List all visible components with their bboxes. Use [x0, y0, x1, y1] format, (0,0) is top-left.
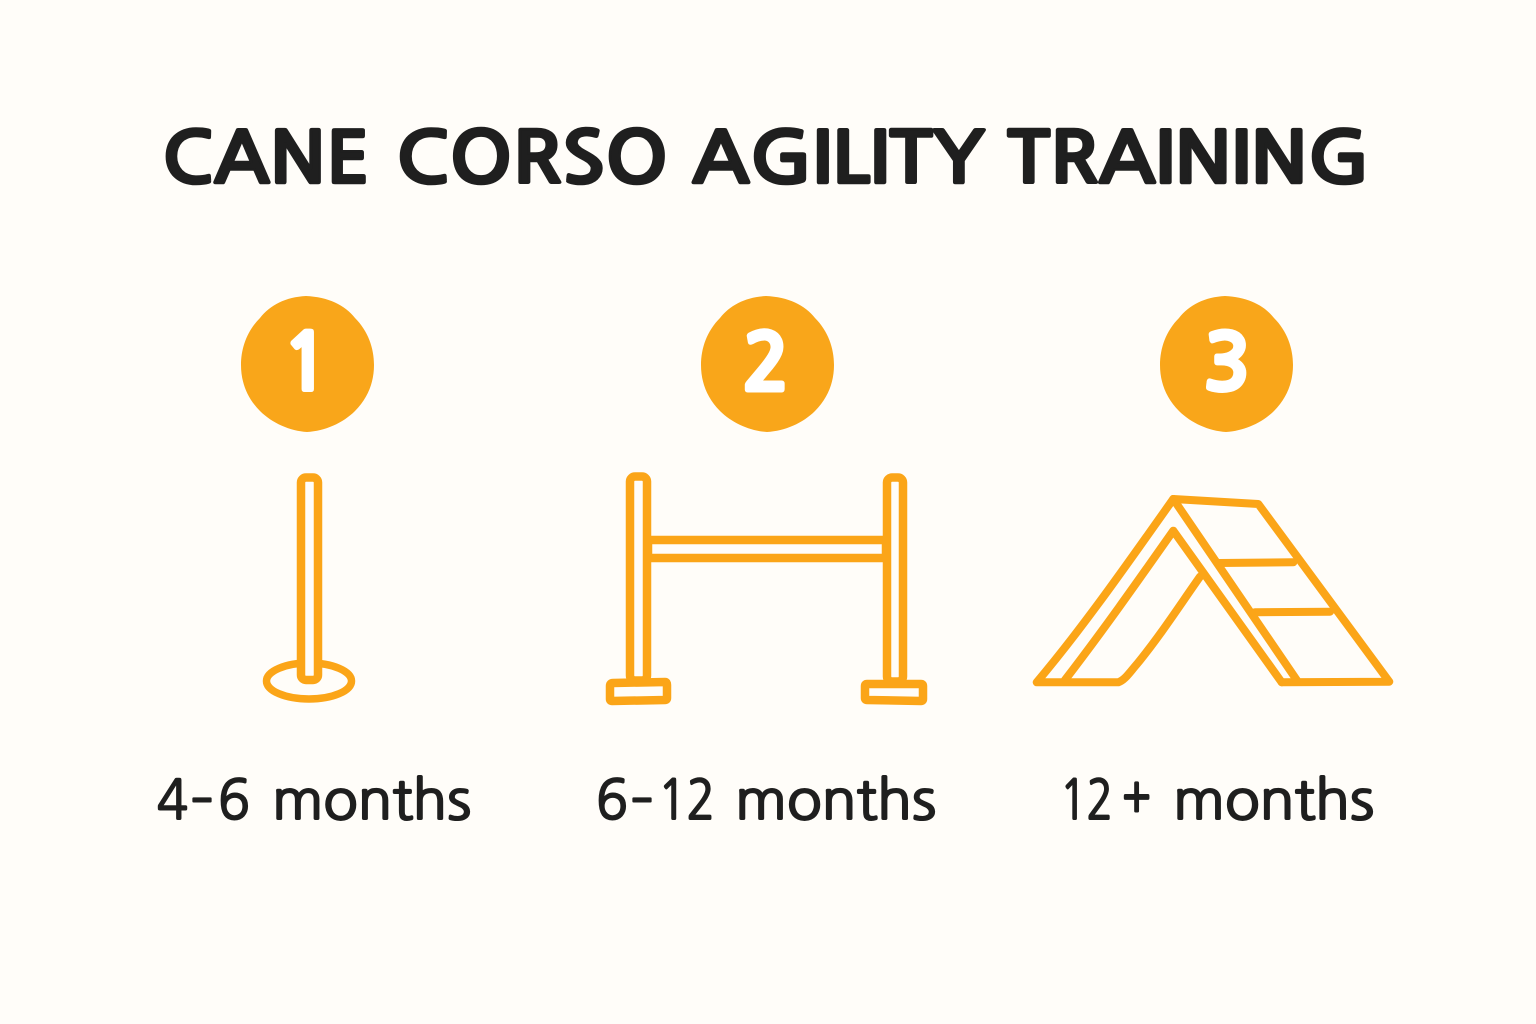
step 1 badge: [241, 296, 374, 432]
step 3 badge: [1160, 296, 1293, 432]
title: CORSO: [396, 123, 668, 194]
title: TRAINING: [1007, 123, 1370, 194]
step 2 badge: 2: [742, 324, 790, 402]
title: AGILITY: [692, 123, 986, 194]
label: 6-12 months: –: [630, 773, 654, 827]
label: 6-12 months: 12: [658, 773, 715, 827]
label: 4-6 months: –: [190, 773, 214, 827]
label: 12+ months: months: [1173, 773, 1374, 827]
label: 6-12 months: 6: [596, 773, 628, 827]
label: 4-6 months: 6: [218, 773, 250, 827]
label: 4-6 months: months: [272, 773, 471, 827]
label: 4-6 months: [157, 773, 471, 827]
label: 6-12 months: months: [735, 773, 936, 827]
title: CANE: [162, 123, 370, 194]
label: 12+ months: [1060, 771, 1374, 827]
icon: jump hurdle: [610, 476, 923, 701]
label: 12+ months: +: [1122, 771, 1151, 825]
step 3 badge: 3: [1203, 324, 1251, 402]
label: 6-12 months: [596, 773, 936, 827]
title: [162, 123, 1370, 194]
icon: A-frame ramp: [1037, 499, 1389, 682]
step 2 badge: [701, 296, 834, 432]
label: 12+ months: 12: [1060, 773, 1113, 827]
step 1 badge: 1: [282, 324, 330, 402]
icon: weave pole: [266, 478, 352, 699]
label: 4-6 months: 4: [157, 773, 188, 827]
